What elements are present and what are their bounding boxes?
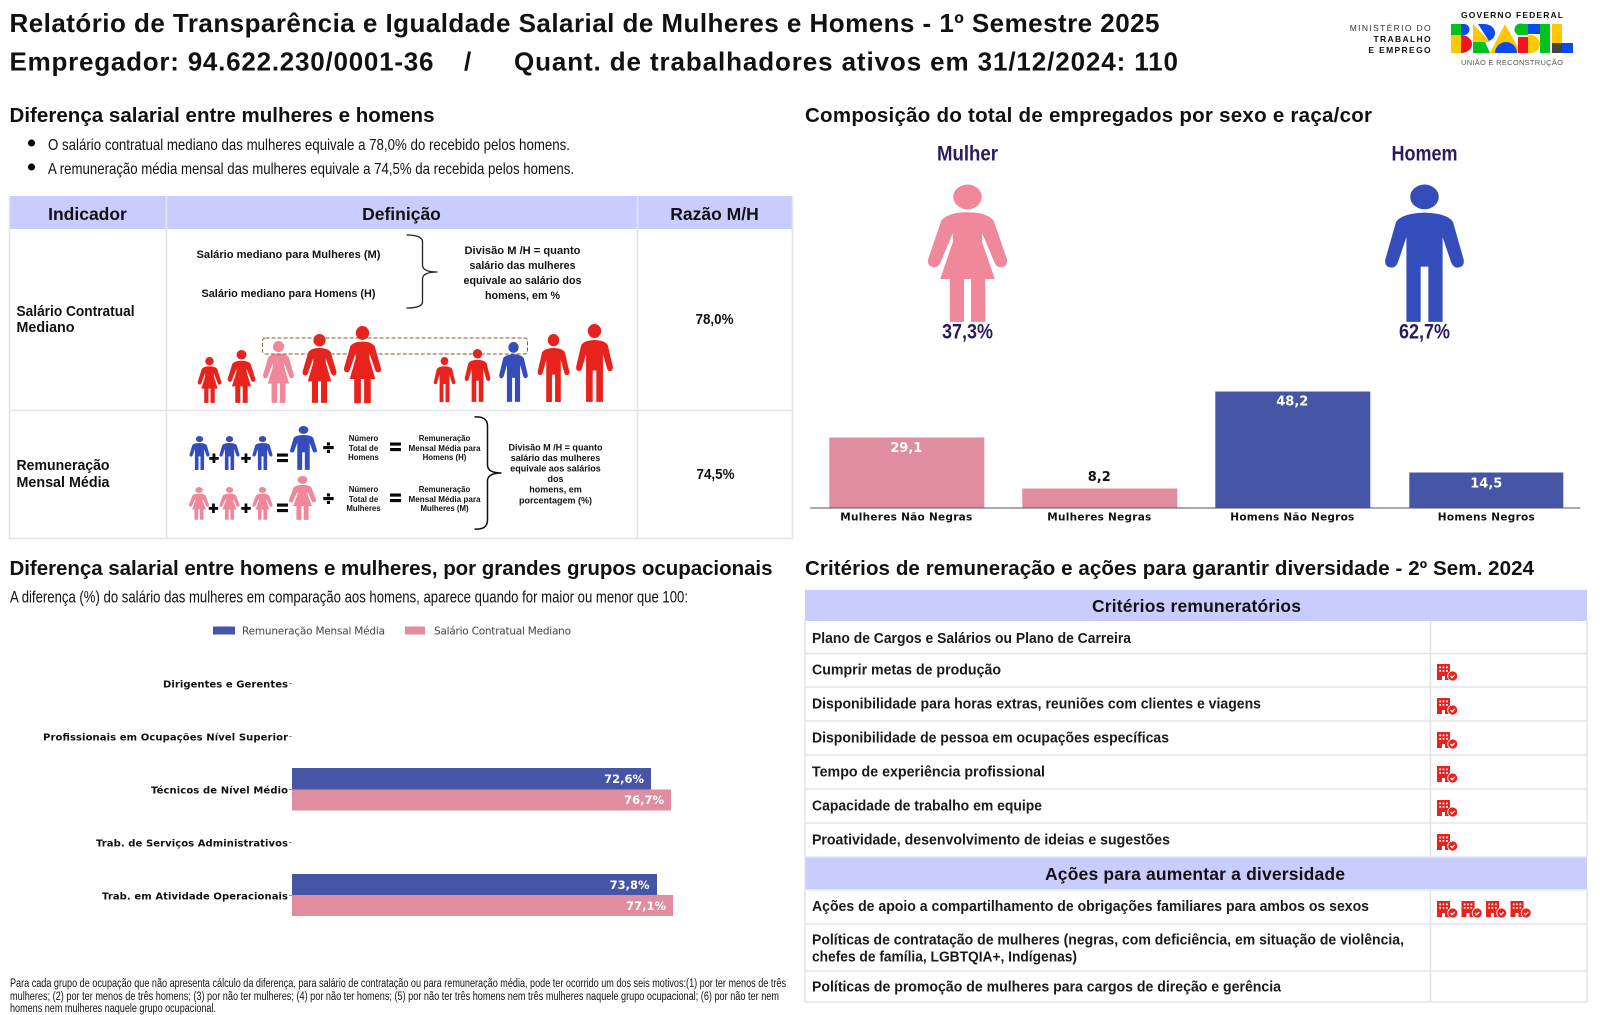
bar chart: occupational groups: 76,7% <box>624 793 664 807</box>
formula: men: = <box>277 448 288 470</box>
footnote: mulheres; (2) por ter menos de três homens; (3) por não ter mulheres; (4) por não ter homens; (5) por não ter três homens nem três mulheres naquele grupo ocupacional; (6) por não ter nem <box>10 991 779 1003</box>
bar chart: sex and race: Homens Negros <box>1438 512 1535 524</box>
definition text 2: porcentagem (%) <box>519 496 592 506</box>
footnote <box>10 978 786 1015</box>
criterion: plano de cargos: Plano de Cargos e Salários ou Plano de Carreira <box>812 631 1132 647</box>
brace 2 <box>474 417 502 529</box>
logo: ministry: MINISTÉRIO DO <box>1350 23 1432 33</box>
bar chart: sex and race <box>810 392 1580 524</box>
category labels: Trab. em Atividade Operacionais <box>102 892 288 902</box>
bar chart: sex and race: Homens Não Negros <box>1230 512 1354 524</box>
criterion: ocupações específicas: Disponibilidade de pessoa em ocupações específicas <box>812 730 1169 746</box>
footnote: homens nem mulheres naquele grupo ocupacional. <box>10 1003 216 1015</box>
definition text 2 <box>508 442 603 506</box>
formula: women: + <box>241 499 251 518</box>
bar chart: sex and race: 14,5 <box>1470 476 1502 492</box>
formula: women: + <box>209 499 219 518</box>
subtitle: chart note: A diferença (%) do salário das mulheres em comparação aos homens, aparece quando for maior ou menor que 100: <box>10 588 688 606</box>
definition text 2: homens, em <box>529 484 582 494</box>
logo: Governo Federal Brasil <box>1451 10 1573 67</box>
formula: women: Mulheres <box>346 504 381 513</box>
figure: mulher: 37,3% <box>942 320 993 344</box>
formula: women: Mulheres (M) <box>420 504 469 513</box>
bar chart: occupational groups: 77,1% <box>626 899 666 913</box>
formula: women: Número <box>349 485 378 494</box>
table header: Razão M/H <box>670 204 759 224</box>
action: apoio familiar <box>812 899 1531 918</box>
subtitle: employer and workforce: Empregador: 94.622.230/0001-36 <box>10 46 434 76</box>
header: ações <box>805 857 1587 889</box>
action: apoio familiar: Ações de apoio a compartilhamento de obrigações familiares para ambos os sexos <box>812 899 1369 915</box>
formula text: salário mediano: Salário mediano para Homens (H) <box>202 288 376 300</box>
formula: women: = <box>277 498 288 520</box>
criterion: metas: Cumprir metas de produção <box>812 662 1001 678</box>
bar chart: sex and race: Mulheres Não Negras <box>840 512 972 524</box>
logo: ministry: TRABALHO <box>1374 34 1432 44</box>
panel: criteria table <box>805 590 1587 1002</box>
panel: indicator table <box>10 196 792 538</box>
criterion: experiência <box>812 764 1458 783</box>
definition text 2: Divisão M /H = quanto <box>508 442 603 452</box>
bar chart: sex and race: 48,2 <box>1276 394 1308 410</box>
category labels: Profissionais em Ocupações Nível Superior <box>43 732 288 744</box>
median marker <box>262 338 528 354</box>
value: 78,0%: 78,0% <box>696 312 734 328</box>
category labels: Trab. de Serviços Administrativos <box>96 838 288 850</box>
bar chart: sex and race: 29,1 <box>890 441 922 456</box>
category labels: Dirigentes e Gerentes <box>163 680 288 690</box>
bullet list: A remuneração média mensal das mulheres equivale a 74,5% da recebida pelos homens. <box>48 161 574 178</box>
legend: Remuneração Mensal Média <box>242 626 385 638</box>
criterion: experiência: Tempo de experiência profissional <box>812 764 1045 780</box>
bar chart: occupational groups <box>43 680 673 916</box>
formula: women: = <box>390 488 401 510</box>
category labels: Técnicos de Nível Médio <box>151 784 288 796</box>
bar chart: sex and race: Mulheres Negras <box>1047 512 1151 524</box>
bar chart: sex and race: 8,2 <box>1088 470 1111 485</box>
formula: men: = <box>390 437 401 459</box>
logo: ministry: E EMPREGO <box>1368 45 1432 55</box>
header: ações: Ações para aumentar a diversidade <box>1045 864 1345 884</box>
bullet list: O salário contratual mediano das mulheres equivale a 78,0% do recebido pelos homens. <box>48 137 570 154</box>
value: 74,5%: 74,5% <box>696 467 735 483</box>
formula: men: + <box>241 449 251 468</box>
icons: men ordered by salary <box>434 324 613 402</box>
criterion: trabalho em equipe <box>812 798 1458 817</box>
legend <box>213 626 571 638</box>
row: salário contratual mediano label: Mediano <box>16 320 75 336</box>
subtitle: employer and workforce: Quant. de trabalhadores ativos em 31/12/2024: 110 <box>514 46 1178 76</box>
heading: diferença por grupos: Diferença salarial entre homens e mulheres, por grandes grupos ocupacionais <box>10 557 772 580</box>
criterion: disponibilidade: Disponibilidade para horas extras, reuniões com clientes e viagens <box>812 696 1261 712</box>
row: remuneração mensal média label: Mensal Média <box>16 475 110 491</box>
heading: composição: Composição do total de empregados por sexo e raça/cor <box>805 104 1372 127</box>
definition text: equivale ao salário dos <box>464 275 582 287</box>
formula: men: Remuneração <box>419 434 471 443</box>
legend: Salário Contratual Mediano <box>434 626 571 638</box>
criterion: trabalho em equipe: Capacidade de trabalho em equipe <box>812 798 1042 814</box>
bar chart: occupational groups: 72,6% <box>604 772 644 786</box>
definition text 2: salário das mulheres <box>511 453 600 463</box>
header: critérios remuneratórios: Critérios remuneratórios <box>1092 596 1301 616</box>
subtitle: employer and workforce <box>10 46 1178 76</box>
heading: diferença salarial: Diferença salarial entre mulheres e homens <box>10 104 434 127</box>
definition text <box>464 245 582 302</box>
definition text: homens, em % <box>485 290 560 302</box>
formula: men: + <box>209 449 219 468</box>
category labels <box>43 680 288 902</box>
figure: mulher: Mulher <box>937 142 998 166</box>
action: contratação <box>812 932 1404 966</box>
bar chart: occupational groups: 73,8% <box>610 878 650 892</box>
header: critérios remuneratórios <box>805 590 1587 621</box>
footnote: Para cada grupo de ocupação que não apresenta cálculo da diferença, para salário de contratação ou para remuneração média, pode ter ocorrido um dos seis motivos:(1) por ter menos de três <box>10 978 786 990</box>
table header: Indicador <box>48 204 127 224</box>
icons: women ordered by salary <box>198 326 381 403</box>
criterion: metas <box>812 662 1458 681</box>
criterion: proatividade: Proatividade, desenvolvimento de ideias e sugestões <box>812 832 1170 848</box>
action: contratação: chefes de família, LGBTQIA+, Indígenas) <box>812 950 1077 966</box>
row: salário contratual mediano label: Salário Contratual <box>16 304 134 320</box>
logo: ministry <box>1350 23 1432 55</box>
title: Relatório de Transparência e Igualdade Salarial de Mulheres e Homens - 1º Semestre 2025 <box>10 8 1160 38</box>
table header <box>10 196 792 229</box>
criterion: proatividade <box>812 832 1458 851</box>
figure: mulher <box>928 142 1007 344</box>
action: promoção: Políticas de promoção de mulheres para cargos de direção e gerência <box>812 980 1282 996</box>
logo: Governo Federal Brasil: UNIÃO E RECONSTRUÇÃO <box>1461 58 1563 67</box>
formula: men: ÷ <box>323 438 334 459</box>
brace <box>406 235 438 308</box>
formula: men: Número <box>349 434 378 443</box>
criterion: disponibilidade <box>812 696 1458 715</box>
action: contratação: Políticas de contratação de mulheres (negras, com deficiência, em situação de violência, <box>812 932 1404 948</box>
formula text: salário mediano: Salário mediano para Mulheres (M) <box>196 249 381 261</box>
heading: critérios: Critérios de remuneração e ações para garantir diversidade - 2º Sem. 2024 <box>805 557 1535 580</box>
formula text: salário mediano <box>196 249 381 300</box>
figure: homem <box>1385 142 1464 344</box>
definition text 2: dos <box>547 474 564 484</box>
figure: homem: Homem <box>1392 142 1458 166</box>
subtitle: employer and workforce: / <box>464 46 471 76</box>
row: salário contratual mediano label <box>16 304 134 336</box>
definition text: salário das mulheres <box>470 260 576 272</box>
row: remuneração mensal média label: Remuneração <box>16 458 110 474</box>
row: remuneração mensal média label <box>16 458 110 491</box>
formula: men <box>189 426 481 470</box>
formula: women: Remuneração <box>419 485 471 494</box>
formula: women: Mensal Média para <box>408 495 481 504</box>
definition text 2: equivale aos salários <box>510 464 601 474</box>
figure: homem: 62,7% <box>1399 320 1450 344</box>
logo: Governo Federal Brasil: GOVERNO FEDERAL <box>1461 10 1563 20</box>
formula: men: Total de <box>349 444 379 453</box>
formula: men: Homens (H) <box>423 453 467 462</box>
formula: women <box>189 476 481 520</box>
formula: men: Homens <box>348 453 380 462</box>
table header: Definição <box>362 204 441 224</box>
formula: women: Total de <box>349 495 379 504</box>
bullet list <box>28 137 574 178</box>
formula: men: Mensal Média para <box>408 444 481 453</box>
formula: women: ÷ <box>323 489 334 510</box>
definition text: Divisão M /H = quanto <box>464 245 581 257</box>
criterion: ocupações específicas <box>812 730 1458 749</box>
